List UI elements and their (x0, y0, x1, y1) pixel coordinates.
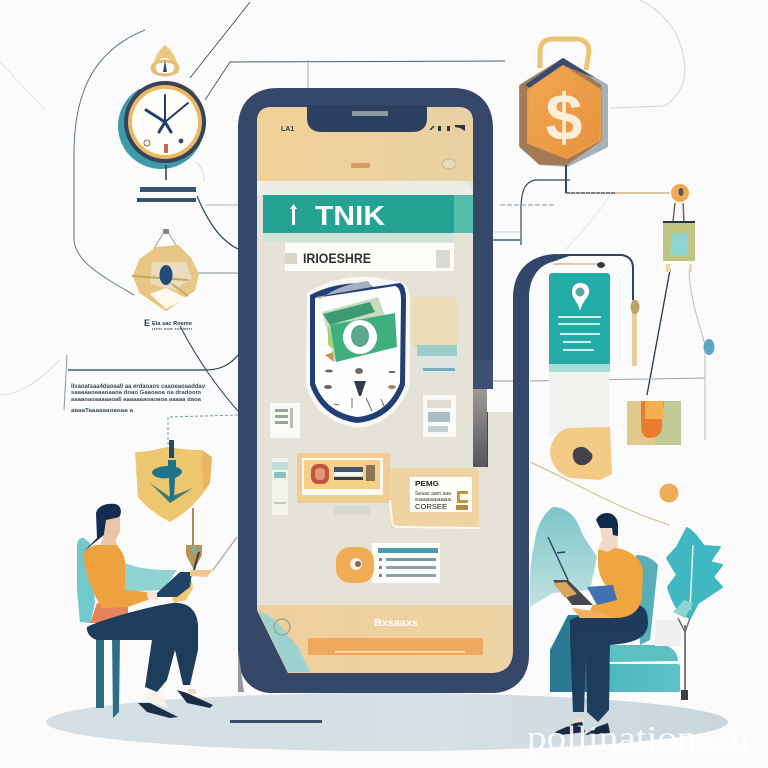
right person shoes (555, 718, 610, 735)
status icons right (429, 125, 465, 131)
left text block (71, 384, 206, 414)
left person tablet (157, 572, 192, 597)
teal banner (263, 195, 473, 242)
left text block: aaaaoaoaaaaaoa6 aaaaaaaoaoaoa aaaaa daoa (71, 397, 202, 403)
gold shield lower left (135, 440, 212, 522)
right person book (587, 585, 617, 605)
right person sweater (590, 547, 643, 618)
right person face (598, 526, 618, 552)
lock icon (521, 39, 606, 193)
pendant caption: E (144, 318, 150, 328)
left person (83, 504, 213, 718)
right person legs (570, 605, 648, 722)
left text block: aaaaTaaaaaaoaoaa a (71, 408, 134, 414)
left person shoes (138, 689, 213, 718)
armchair (550, 555, 681, 692)
orange button (308, 638, 483, 655)
phone screen (257, 107, 513, 673)
left person coral shirt (90, 603, 128, 623)
teal banner: TNIK (315, 200, 385, 231)
gold hexagon pendant icon (132, 229, 198, 310)
left person trousers (87, 603, 198, 692)
pendant caption (144, 318, 193, 331)
small side widget (272, 458, 370, 515)
small doc right (423, 395, 456, 437)
watermark: pollinations.ai (527, 720, 750, 757)
bottom stand (230, 650, 322, 723)
teal card on second phone (549, 273, 610, 434)
lock icon: $ (546, 80, 582, 154)
orange card two: Seaas aam aaa (415, 491, 451, 497)
bottom label: Bxsaaxs (374, 618, 418, 629)
tablet stand (190, 570, 213, 577)
tan bulb card (550, 427, 612, 480)
ground ellipse (46, 693, 728, 751)
orange card two: eaaaaaaaaa (415, 497, 451, 503)
orange card two (390, 468, 479, 528)
clock icon (118, 45, 206, 182)
small doc left (270, 403, 300, 438)
small hanging pendant (663, 184, 695, 272)
orange card two: PEMG (415, 479, 439, 488)
connector lines (0, 0, 705, 525)
right background leaf (530, 507, 597, 607)
bars under clock (137, 187, 196, 202)
right person (548, 513, 648, 735)
right person hair (596, 513, 618, 536)
tan box with orange tab (627, 401, 681, 445)
side tan panel (412, 297, 457, 376)
second phone top edge (513, 254, 640, 366)
left text block: Ilsaoatsaa4daoaa0 aa erdaoaos caaoeaoaaddav (71, 384, 206, 390)
pendant caption: Ela sac Roeme (152, 321, 192, 327)
speaker dash and dot (351, 159, 456, 169)
white label (285, 243, 454, 271)
left person gold lap item (172, 580, 193, 603)
notch (307, 105, 427, 132)
left person hair (84, 504, 121, 551)
small pendant by left person (186, 508, 237, 570)
blue drop (704, 339, 714, 355)
left person face (100, 517, 120, 547)
main phone body (238, 88, 529, 693)
status text: LA1 (281, 126, 294, 133)
wallet shield clock (306, 277, 410, 428)
orange card one (297, 453, 390, 503)
left chair (77, 538, 177, 718)
white label: IRIOESHRE (303, 250, 371, 266)
orange card two: CORSEE (415, 504, 447, 511)
orange circle (660, 484, 678, 502)
banknotes (322, 297, 397, 362)
left person sweater (83, 545, 153, 608)
orange card three (336, 543, 440, 583)
left person hand (146, 590, 158, 600)
plant (667, 528, 722, 700)
right person tablet (548, 537, 612, 618)
pendant caption: rmo coe rcelem (152, 326, 193, 331)
left text block: saaaaaoaaaoaaoa doao Gaaoaoa oa dradoom (71, 390, 201, 396)
